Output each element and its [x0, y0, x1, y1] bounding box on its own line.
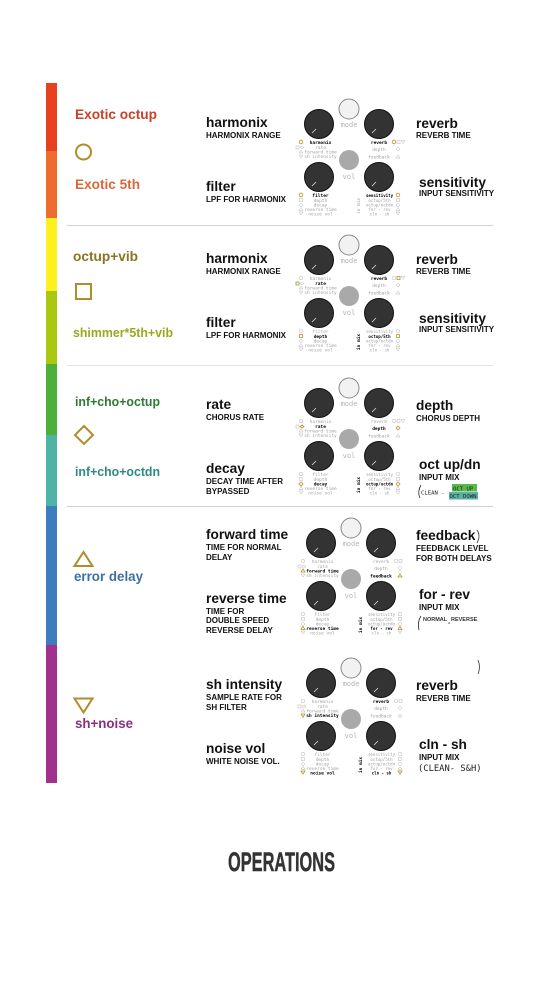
mode group: circle — [75, 106, 157, 192]
panel 5: controls: octup/octdn — [368, 762, 396, 766]
mode group: triangle — [74, 552, 143, 584]
row 3 knob descriptions — [206, 397, 481, 496]
panel 2: controls — [296, 235, 405, 354]
panel 5: controls: mode — [343, 680, 359, 688]
row 5 knob descriptions: REVERB TIME — [416, 694, 471, 703]
row 1 knob descriptions: harmonix — [206, 115, 268, 130]
row 1 knob descriptions: sensitivity — [419, 175, 486, 190]
panel 1: controls: decay — [314, 202, 328, 208]
panel 4: controls: sh intensity — [306, 573, 339, 579]
input mix note: normal to reverse: REVERSE — [451, 617, 478, 623]
input mix note: normal to reverse: NORMAL — [423, 617, 448, 623]
row 1 knob descriptions: filter — [206, 179, 236, 194]
row 2 knob descriptions: REVERB TIME — [416, 267, 471, 276]
mode group: diamond: inf+cho+octdn — [75, 465, 160, 479]
panel 2: controls: sensitivity — [366, 329, 394, 334]
panel 2: controls: noise vol — [308, 348, 333, 354]
panel 3: controls: filter — [312, 472, 329, 478]
row 3 knob descriptions: BYPASSED — [206, 487, 250, 496]
input mix note: normal to reverse — [418, 616, 478, 630]
row 5 knob descriptions: SAMPLE RATE FOR — [206, 693, 282, 702]
panel 1: controls: noise vol — [308, 212, 333, 218]
panel 3: controls: reverse time — [304, 486, 337, 492]
panel 5: controls: rate — [317, 704, 328, 710]
panel 2: controls: sh intensity — [304, 290, 337, 296]
panel 3: controls: sh intensity — [304, 433, 337, 439]
panel 2: controls: for - rev — [368, 343, 391, 348]
row 1 knob descriptions: reverb — [416, 116, 458, 131]
row 3 knob descriptions: rate — [206, 397, 231, 412]
panel 5: controls: vol — [345, 732, 357, 740]
row 4 knob descriptions: FOR BOTH DELAYS — [416, 554, 492, 563]
panel 3: controls: forward time — [304, 428, 337, 434]
panel 5: controls: octup/5th — [370, 757, 393, 762]
row 2 knob descriptions: reverb — [416, 252, 458, 267]
mode group: circle: Exotic octup — [75, 106, 157, 122]
panel 1: controls: depth — [314, 198, 328, 204]
row 3 knob descriptions: DECAY TIME AFTER — [206, 477, 283, 486]
title: OPERATIONS — [228, 847, 335, 877]
panel 3: controls: depth — [314, 477, 328, 483]
panel 4: controls: reverse time — [306, 626, 339, 632]
panel 4: controls: cln - sh — [372, 630, 392, 636]
panel 4: controls: rate — [317, 564, 328, 570]
mode group: diamond: inf+cho+octup — [75, 395, 160, 409]
row 3 knob descriptions: CHORUS DEPTH — [416, 414, 480, 423]
panel 3: controls: harmonix — [310, 419, 332, 425]
panel 4: controls — [298, 518, 402, 636]
panel 4: controls: noise vol — [310, 630, 335, 636]
mode group: inverted triangle: sh+noise — [75, 715, 133, 731]
row 4 knob descriptions: DOUBLE SPEED — [206, 616, 269, 625]
panel 4: controls: depth — [316, 617, 330, 623]
row 4 knob descriptions: forward time — [206, 527, 289, 542]
row 3 knob descriptions: CHORUS RATE — [206, 413, 265, 422]
row 5 knob descriptions: WHITE NOISE VOL. — [206, 757, 280, 766]
panel 5: controls: depth — [316, 757, 330, 763]
panel 2: controls: vol — [343, 309, 355, 317]
panel 1: controls — [296, 99, 405, 218]
panel 2: controls: reverb — [371, 276, 387, 282]
panel 4: controls: feedback — [370, 574, 392, 580]
panel 5: controls: filter — [314, 752, 331, 758]
panel 1: controls: filter — [312, 193, 329, 199]
panel 3: controls: feedback — [368, 434, 390, 440]
panel 3: controls: cln - sh — [370, 490, 390, 496]
row 4 knob descriptions: INPUT MIX — [419, 603, 460, 612]
panel 4: controls: forward time — [306, 568, 339, 574]
input mix note: clean to oct up / oct down — [419, 484, 478, 500]
mode group: diamond — [75, 395, 160, 479]
panel 4: controls: octup/octdn — [368, 622, 396, 626]
panel 4: controls: harmonix — [312, 559, 334, 565]
panel 3: controls: sensitivity — [366, 472, 394, 477]
panel 3: controls: decay — [314, 482, 328, 488]
panel 2: controls: mode — [341, 257, 357, 265]
panel 5: controls: in mix — [358, 757, 364, 773]
mode group: square — [73, 248, 173, 340]
row 3 knob descriptions: INPUT MIX — [419, 473, 460, 482]
panel 3: controls: reverb — [371, 419, 387, 425]
panel 1: controls: harmonix — [310, 140, 332, 146]
mode group: inverted triangle — [74, 698, 133, 731]
panel 1: controls: sh intensity — [304, 154, 337, 160]
row 5 knob descriptions — [206, 660, 482, 774]
panel 1: controls: reverse time — [304, 207, 337, 213]
row 1 knob descriptions: INPUT SENSITIVITY — [419, 189, 495, 198]
row 3 knob descriptions: depth — [416, 398, 453, 413]
panel 5: controls: decay — [316, 762, 330, 768]
panel 1: controls: vol — [343, 173, 355, 181]
panel 2: controls: forward time — [304, 286, 337, 292]
row 1 knob descriptions: HARMONIX RANGE — [206, 131, 281, 140]
panel 5: controls: sh intensity — [306, 713, 339, 719]
row 5 knob descriptions: INPUT MIX — [419, 753, 460, 762]
panel 4: controls: filter — [314, 612, 331, 618]
panel 3: controls: depth — [372, 426, 386, 432]
panel 1: controls: cln - sh — [370, 212, 390, 216]
panel 1: controls: mode — [341, 121, 357, 129]
panel 2: controls: cln - sh — [370, 348, 390, 352]
panel 4: controls: sensitivity — [368, 612, 396, 617]
panel 3: controls: for - rev — [368, 486, 391, 491]
panel 2: controls: depth — [314, 334, 328, 340]
row 2 knob descriptions: filter — [206, 315, 236, 330]
row 2 knob descriptions: LPF FOR HARMONIX — [206, 331, 287, 340]
row 4 knob descriptions: REVERSE DELAY — [206, 626, 274, 635]
row 5 knob descriptions: cln - sh — [419, 737, 467, 752]
mode group: square: shimmer*5th+vib — [73, 326, 173, 340]
panel 5: controls: cln - sh — [372, 770, 392, 776]
panel 2: controls: harmonix — [310, 276, 332, 282]
panel 1: controls: rate — [315, 145, 326, 151]
panel 5: controls: depth — [374, 706, 388, 712]
panel 4: controls: in mix — [358, 617, 364, 633]
panel 2: controls: rate — [315, 281, 326, 287]
panel 4: controls: for - rev — [370, 626, 393, 631]
panel 1: controls: depth — [372, 147, 386, 153]
panel 1: controls: octup/5th — [368, 198, 391, 203]
panel 4: controls: reverb — [373, 559, 389, 565]
panel 3: controls: rate — [315, 424, 326, 430]
panel 5: controls: feedback — [370, 714, 392, 720]
panel 5: controls: harmonix — [312, 699, 334, 705]
row 2 knob descriptions: sensitivity — [419, 311, 486, 326]
panel 5: controls: reverse time — [306, 766, 339, 772]
panel 2: controls: octup/5th — [368, 334, 391, 339]
panel 5: controls: forward time — [306, 708, 339, 714]
mode group: triangle: error delay — [74, 568, 143, 584]
row 5 knob descriptions: noise vol — [206, 741, 265, 756]
row 2 knob descriptions — [206, 251, 495, 340]
panel 1: controls: reverb — [371, 140, 387, 146]
row 4 knob descriptions: FEEDBACK LEVEL — [416, 544, 489, 553]
panel 2: controls: filter — [312, 329, 329, 335]
row 5 knob descriptions: SH FILTER — [206, 703, 247, 712]
row 1 knob descriptions: LPF FOR HARMONIX — [206, 195, 287, 204]
panel 1: controls: sensitivity — [366, 193, 394, 198]
panel 5: controls: sensitivity — [368, 752, 396, 757]
row 1 knob descriptions: REVERB TIME — [416, 131, 471, 140]
row 1 knob descriptions — [206, 115, 495, 204]
panel 1: controls: feedback — [368, 154, 390, 160]
row 4 knob descriptions: for - rev — [419, 587, 470, 602]
row 2 knob descriptions: HARMONIX RANGE — [206, 267, 281, 276]
input mix note: normal to reverse: - — [448, 620, 451, 627]
row 4 knob descriptions: DELAY — [206, 553, 233, 562]
panel 5: controls: reverb — [373, 699, 389, 705]
input mix note: clean to oct up / oct down: OCT DOWN — [450, 494, 476, 500]
panel 3: controls: noise vol — [308, 490, 333, 496]
row 3 knob descriptions: decay — [206, 461, 245, 476]
row 2 knob descriptions: INPUT SENSITIVITY — [419, 325, 495, 334]
row 4 knob descriptions: reverse time — [206, 591, 287, 606]
panel 3: controls — [296, 378, 405, 496]
panel 5: controls: for - rev — [370, 766, 393, 771]
panel 3: controls: octup/octdn — [366, 482, 394, 486]
panel 3: controls: vol — [343, 452, 355, 460]
mode group: square: octup+vib — [73, 248, 138, 264]
panel 2: controls: decay — [314, 338, 328, 344]
row 2 knob descriptions: harmonix — [206, 251, 268, 266]
row 4 knob descriptions: feedback — [416, 528, 476, 543]
panel 2: controls: in mix — [356, 334, 362, 350]
panel 1: controls: for - rev — [368, 207, 391, 212]
panel 3: controls: octup/5th — [368, 477, 391, 482]
panel 1: controls: forward time — [304, 150, 337, 156]
panel 3: controls: mode — [341, 400, 357, 408]
panel 2: controls: feedback — [368, 290, 390, 296]
panel 3: controls: in mix — [356, 477, 362, 493]
row 5 knob descriptions: sh intensity — [206, 677, 282, 692]
panel 5: controls — [298, 658, 402, 776]
input mix note: clean to oct up / oct down: OCT UP — [453, 486, 474, 492]
panel 4: controls: decay — [316, 622, 330, 628]
row 5 knob descriptions: (CLEAN- S&H) — [418, 764, 482, 774]
panel 4: controls: depth — [374, 566, 388, 572]
input mix note: clean to oct up / oct down: CLEAN - — [421, 490, 445, 496]
panel 2: controls: depth — [372, 283, 386, 289]
row 3 knob descriptions: oct up/dn — [419, 457, 481, 472]
row 4 knob descriptions — [206, 527, 492, 635]
panel 4: controls: mode — [343, 540, 359, 548]
panel 2: controls: octup/octdn — [366, 338, 394, 344]
panel 4: controls: octup/5th — [370, 617, 393, 622]
panel 1: controls: octup/octdn — [366, 202, 394, 208]
mode group: circle: Exotic 5th — [75, 176, 140, 192]
row 4 knob descriptions: TIME FOR NORMAL — [206, 543, 282, 552]
row 4 knob descriptions: TIME FOR — [206, 607, 244, 616]
panel 1: controls: in mix — [356, 198, 362, 214]
panel 5: controls: noise vol — [310, 770, 335, 776]
panel 4: controls: vol — [345, 592, 357, 600]
rainbow colour bar — [46, 83, 57, 783]
row 5 knob descriptions: reverb — [416, 678, 458, 693]
panel 2: controls: reverse time — [304, 343, 337, 349]
